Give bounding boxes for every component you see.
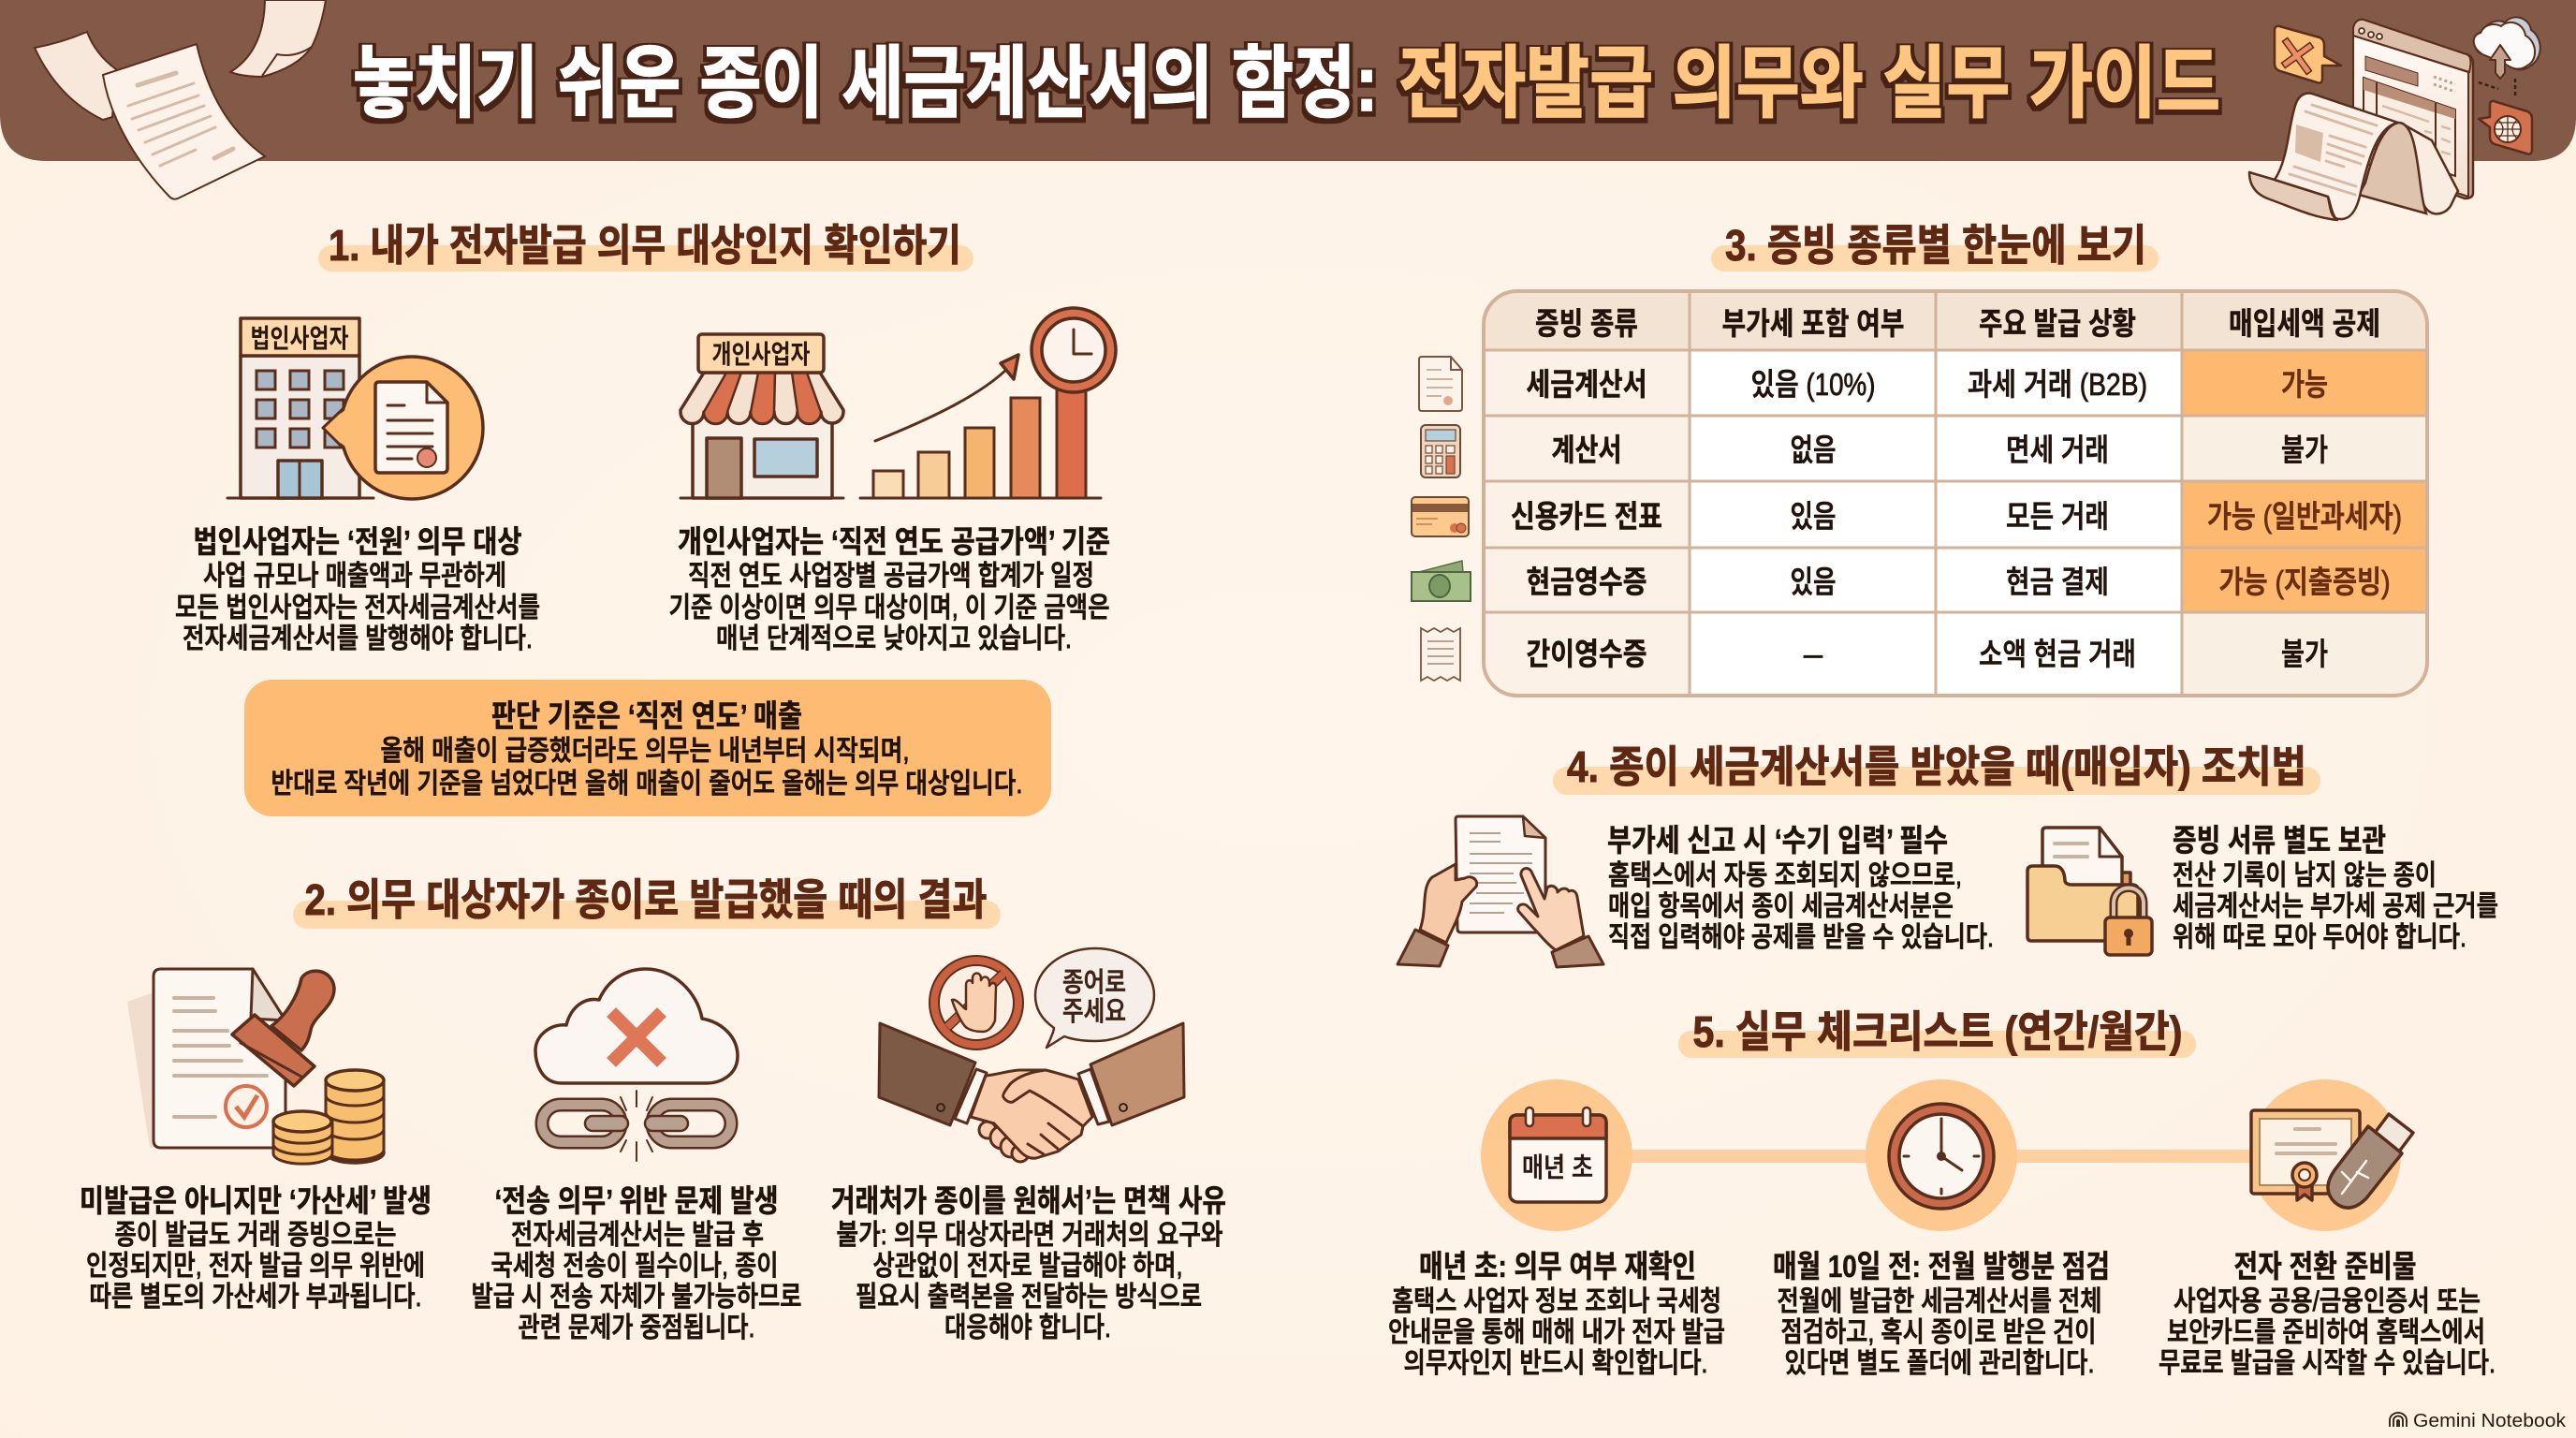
text block: no exemption: 상관없이 전자로 발급해야 하며, — [872, 1251, 1183, 1282]
text block: penalty: 종이 발급도 거래 증빙으로는 — [114, 1220, 397, 1251]
title: orange part: 전자발급 의무와 실무 가이드 — [1398, 39, 2220, 127]
text block: start of year: 홈택스 사업자 정보 조회나 국세청 — [1392, 1286, 1721, 1317]
icon: left hand — [1398, 864, 1477, 966]
text block: before the 10th: 전월에 발급한 세금계산서를 전체 — [1777, 1286, 2102, 1317]
heading: section 5: 5. 실무 체크리스트 (연간/월간) — [1692, 1007, 2183, 1056]
text block: transmission duty: 국세청 전송이 필수이나, 종이 — [490, 1251, 779, 1282]
table row: simple receipt: 불가 — [2281, 637, 2328, 671]
text block: preparation: 보안카드를 준비하여 홈택스에서 — [2167, 1317, 2485, 1348]
text block: separate storage: 위해 따로 모아 두어야 합니다. — [2173, 922, 2466, 953]
icon: electronic tax documents illustration — [2249, 17, 2540, 220]
icon: tax invoice — [1419, 357, 1462, 411]
text block: transmission duty — [472, 1183, 801, 1343]
icon: document, stamp and coins — [127, 969, 384, 1164]
text block: start of year: 안내문을 통해 매해 내가 전자 발급 — [1388, 1317, 1725, 1348]
title: white part: 놓치기 쉬운 종이 세금계산서의 함정: — [353, 39, 1378, 127]
table row: credit card slip: 있음 — [1790, 499, 1837, 534]
table row: tax invoice: 과세 거래 (B2B) — [1968, 367, 2147, 402]
icon: globe bubble — [2479, 101, 2532, 154]
callout: judging criterion — [244, 680, 1051, 816]
text block: preparation: 사업자용 공용/금융인증서 또는 — [2174, 1286, 2481, 1317]
text block: no exemption: 불가: 의무 대상자라면 거래처의 요구와 — [837, 1220, 1222, 1251]
text block: transmission duty: 발급 시 전송 자체가 불가능하므로 — [472, 1282, 801, 1313]
table row: tax invoice: 세금계산서 — [1526, 367, 1647, 402]
text block: separate storage — [2173, 823, 2498, 953]
section 3 — [1412, 221, 2427, 696]
section 1 — [175, 221, 1116, 816]
timeline node: start of year: 매년 초 — [1522, 1152, 1593, 1183]
text block: preparation: 전자 전환 준비물 — [2233, 1249, 2417, 1284]
timeline node: start of year — [1481, 1079, 1632, 1231]
table row: simple receipt: – — [1804, 637, 1823, 671]
table row: credit card slip: 신용카드 전표 — [1511, 499, 1662, 534]
icon: flying paper sheets — [35, 0, 326, 199]
table header row: 부가세 포함 여부 — [1722, 306, 1904, 341]
text block: before the 10th — [1773, 1249, 2110, 1379]
text block: no exemption: 대응해야 합니다. — [944, 1313, 1111, 1343]
text block: manual entry: 매입 항목에서 종이 세금계산서분은 — [1608, 891, 1954, 922]
text block: individual businesses: 매년 단계적으로 낮아지고 있습니다. — [716, 624, 1072, 654]
table row: credit card slip: 가능 (일반과세자) — [2207, 499, 2402, 534]
text block: start of year: 매년 초: 의무 여부 재확인 — [1419, 1249, 1696, 1284]
icon: shop — [681, 334, 843, 498]
table row: simple receipt: 소액 현금 거래 — [1979, 637, 2136, 671]
heading: section 2: 2. 의무 대상자가 종이로 발급했을 때의 결과 — [305, 875, 987, 924]
text block: start of year: 의무자인지 반드시 확인합니다. — [1404, 1348, 1707, 1379]
heading highlight: section 4 — [1553, 767, 2320, 795]
icon: cloud upload — [2474, 17, 2540, 98]
callout: judging criterion: 판단 기준은 ‘직전 연도’ 매출 — [491, 698, 802, 733]
timeline node: monthly clock — [1866, 1079, 2017, 1231]
text block: before the 10th: 점검하고, 혹시 종이로 받은 건이 — [1780, 1317, 2097, 1348]
table row: tax invoice — [1526, 367, 2328, 402]
text block: corporate businesses: 모든 법인사업자는 전자세금계산서를 — [175, 593, 540, 624]
icon: clasped hands — [971, 1070, 1092, 1162]
table header row: 증빙 종류 — [1535, 306, 1638, 341]
text block: corporate businesses: 법인사업자는 ‘전원’ 의무 대상 — [193, 524, 522, 559]
text block: preparation — [2159, 1249, 2496, 1379]
text block: individual businesses: 직전 연도 사업장별 공급가액 합계가 일정 — [688, 561, 1094, 592]
text block: individual businesses: 개인사업자는 ‘직전 연도 공급가액’ 기준 — [678, 524, 1110, 559]
text block: penalty: 따른 별도의 가산세가 부과됩니다. — [90, 1282, 421, 1313]
table row: tax invoice: 있음 (10%) — [1750, 367, 1876, 402]
table header row: 주요 발급 상황 — [1979, 306, 2136, 341]
heading highlight: section 5 — [1678, 1031, 2196, 1058]
icon: right hand — [1518, 869, 1603, 967]
icon: browser window — [2353, 20, 2473, 198]
table row: credit card slip: 모든 거래 — [2006, 499, 2109, 534]
table row: invoice — [1552, 433, 2328, 467]
icon: cloud and broken chain — [535, 969, 738, 1161]
callout: speech bubble: 종어로 — [1062, 967, 1126, 998]
icon: handshake refusal — [879, 948, 1184, 1162]
icon: credit card — [1412, 497, 1469, 536]
callout: judging criterion: 반대로 작년에 기준을 넘었다면 올해 매출이 줄어도 올해는 의무 대상입니다. — [271, 769, 1022, 800]
text block: penalty: 미발급은 아니지만 ‘가산세’ 발생 — [80, 1183, 432, 1218]
icon: corporate building — [227, 318, 483, 499]
callout: speech bubble: 주세요 — [1062, 996, 1126, 1027]
text block: no exemption: 거래처가 종이를 원해서’는 면책 사유 — [831, 1183, 1226, 1218]
icon: calculator — [1421, 425, 1460, 477]
table header row — [1535, 306, 2380, 341]
table row: invoice: 불가 — [2281, 433, 2328, 467]
text block: corporate businesses: 사업 규모나 매출액과 무관하게 — [203, 561, 506, 592]
text block: transmission duty: 관련 문제가 중점됩니다. — [519, 1313, 754, 1343]
icon: corporate building: 법인사업자 — [251, 324, 349, 353]
text block: transmission duty: ‘전송 의무’ 위반 문제 발생 — [494, 1183, 779, 1218]
text block: individual businesses — [668, 524, 1110, 654]
chart: rising bars with clock — [860, 308, 1116, 498]
timeline node: certificate and USB — [2249, 1079, 2413, 1231]
icon: prohibition sign — [934, 961, 1018, 1045]
icon: hands holding paper — [1398, 816, 1603, 967]
text block: manual entry: 홈택스에서 자동 조회되지 않으므로, — [1608, 860, 1962, 891]
heading highlight: section 2 — [293, 901, 1001, 929]
header banner — [0, 0, 2576, 161]
section 2 — [80, 875, 1226, 1343]
text block: individual businesses: 기준 이상이면 의무 대상이며, 이 기준 금액은 — [668, 593, 1110, 624]
heading: section 4: 4. 종이 세금계산서를 받았을 때(매입자) 조치법 — [1567, 742, 2306, 791]
text block: manual entry — [1607, 823, 1994, 953]
icon: curled receipt — [2249, 93, 2458, 220]
text block: before the 10th: 있다면 별도 폴더에 관리합니다. — [1784, 1348, 2095, 1379]
text block: separate storage: 전산 기록이 남지 않는 종이 — [2173, 860, 2437, 891]
table header row: 매입세액 공제 — [2229, 306, 2380, 341]
heading: section 1: 1. 내가 전자발급 의무 대상인지 확인하기 — [329, 221, 961, 270]
text block: penalty — [80, 1183, 432, 1313]
icon: sleeves — [879, 1023, 1184, 1125]
table row: cash receipt: 현금영수증 — [1526, 565, 1647, 599]
table row: invoice: 면세 거래 — [2006, 433, 2109, 467]
text block: separate storage: 세금계산서는 부가세 공제 근거를 — [2173, 891, 2498, 922]
table row: cash receipt: 가능 (지출증빙) — [2218, 565, 2391, 599]
heading highlight: section 3 — [1711, 245, 2159, 271]
section 5 — [1388, 1007, 2496, 1379]
text block: manual entry: 부가세 신고 시 ‘수기 입력’ 필수 — [1607, 823, 1948, 858]
timeline connector — [1557, 1150, 2325, 1163]
table row: cash receipt — [1526, 565, 2391, 599]
table row: cash receipt: 현금 결제 — [2006, 565, 2109, 599]
table: evidence comparison — [1484, 291, 2427, 696]
icon: cash — [1412, 561, 1471, 601]
watermark: Gemini Notebook — [2413, 1411, 2567, 1431]
text block: start of year — [1388, 1249, 1725, 1379]
text block: no exemption: 필요시 출력본을 전달하는 방식으로 — [856, 1282, 1202, 1313]
table row: invoice: 없음 — [1790, 433, 1837, 467]
section 4 — [1398, 742, 2498, 967]
table row: invoice: 계산서 — [1552, 433, 1621, 467]
text block: before the 10th: 매월 10일 전: 전월 발행분 점검 — [1773, 1249, 2110, 1284]
table row: simple receipt: 간이영수증 — [1526, 637, 1647, 671]
table row: cash receipt: 있음 — [1790, 565, 1837, 599]
text block: separate storage: 증빙 서류 별도 보관 — [2173, 823, 2386, 858]
callout: judging criterion: 올해 매출이 급증했더라도 의무는 내년부터 시작되며, — [380, 736, 910, 767]
text block: transmission duty: 전자세금계산서는 발급 후 — [511, 1220, 764, 1251]
icon: error speech bubble — [2275, 26, 2341, 82]
icon: shop: 개인사업자 — [711, 340, 811, 369]
heading: section 3: 3. 증빙 종류별 한눈에 보기 — [1725, 221, 2146, 270]
text block: no exemption — [831, 1183, 1226, 1343]
text block: preparation: 무료로 발급을 시작할 수 있습니다. — [2159, 1348, 2496, 1379]
text block: corporate businesses: 전자세금계산서를 발행해야 합니다. — [183, 624, 533, 654]
text block: corporate businesses — [175, 524, 540, 654]
text block: penalty: 인정되지만, 전자 발급 의무 위반에 — [86, 1251, 425, 1282]
table row: tax invoice: 가능 — [2281, 367, 2328, 402]
icon: simple receipt — [1421, 628, 1460, 681]
table row: credit card slip — [1511, 499, 2402, 534]
callout: speech bubble — [1035, 948, 1154, 1048]
text block: manual entry: 직접 입력해야 공제를 받을 수 있습니다. — [1608, 922, 1994, 953]
table row: simple receipt — [1526, 637, 2328, 671]
icon: folder with lock — [2027, 828, 2152, 955]
heading highlight: section 1 — [318, 245, 973, 271]
